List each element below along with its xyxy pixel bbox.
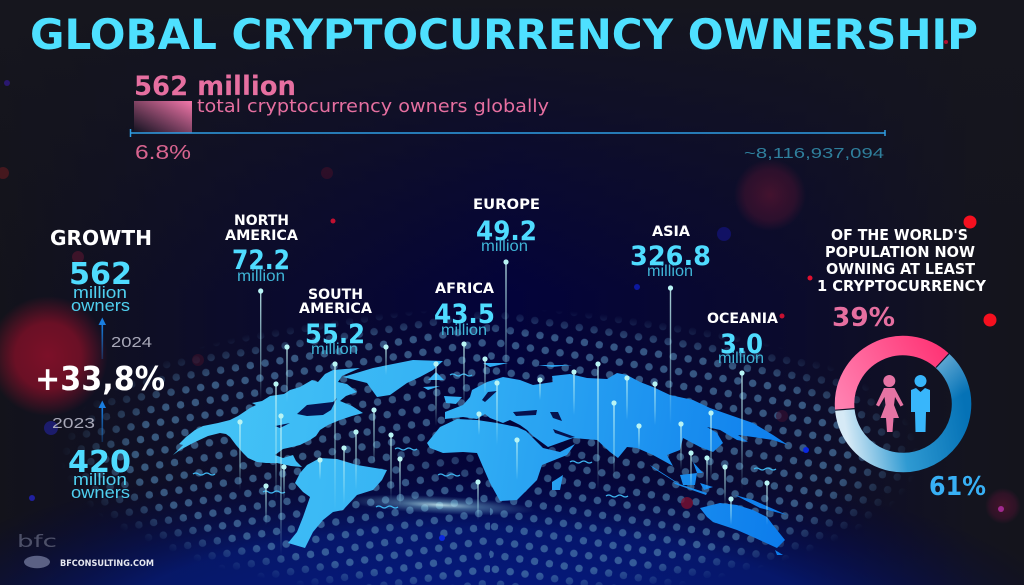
map: greenland — [343, 360, 443, 397]
region: north america — [225, 213, 298, 285]
2024 owners — [69, 257, 132, 315]
region: north america: AMERICA — [225, 228, 298, 244]
39 percent: 39% — [832, 303, 895, 333]
growth percentage: +33,8% — [35, 359, 165, 398]
2024 owners: owners — [71, 296, 130, 315]
region: oceania: million — [718, 350, 764, 367]
region: south america: AMERICA — [299, 301, 372, 317]
2023 label: 2023 — [52, 415, 95, 432]
arrow up 2024 — [98, 318, 106, 359]
share percent: 6.8% — [135, 142, 191, 164]
61 percent: 61% — [929, 472, 986, 502]
map: australia — [700, 503, 785, 548]
region: asia: ASIA — [652, 224, 690, 240]
region: north america: million — [237, 268, 285, 285]
world population: ~8,116,937,094 — [744, 145, 884, 162]
region: south america: million — [311, 341, 358, 358]
title: GLOBAL CRYPTOCURRENCY OWNERSHIP — [30, 10, 978, 59]
region: asia: million — [647, 263, 693, 280]
region: europe: 49.2 — [476, 216, 537, 247]
2024 label: 2024 — [111, 334, 152, 351]
region: south america: SOUTH — [308, 287, 363, 303]
share description — [817, 226, 987, 295]
map inland seas — [275, 391, 575, 438]
arrow up 2023 — [98, 400, 106, 442]
logo: bfc — [17, 532, 154, 569]
subtitle: total cryptocurrency owners globally — [197, 96, 549, 117]
light streak across the south atlantic — [345, 491, 535, 519]
region: north america: NORTH — [234, 213, 289, 229]
share description: OWNING AT LEAST — [826, 260, 976, 278]
share bar — [134, 101, 192, 132]
region: oceania: OCEANIA — [707, 311, 778, 327]
2023 owners — [68, 445, 131, 502]
2024 owners: 562 — [69, 257, 132, 292]
dotted perspective globe pattern — [40, 310, 940, 585]
region: south america: 55.2 — [305, 319, 365, 350]
panel: global owners progress bar — [130, 71, 885, 164]
share description: 1 CRYPTOCURRENCY — [817, 277, 987, 295]
ocean wave marks — [193, 374, 776, 508]
region: south america — [299, 287, 372, 358]
region: oceania: 3.0 — [720, 329, 763, 360]
region: north america: 72.2 — [232, 245, 290, 276]
region: africa: AFRICA — [435, 281, 494, 297]
map: north america — [173, 368, 363, 467]
headline number: 562 million — [134, 71, 296, 102]
map: islands — [423, 363, 787, 555]
map location pins — [237, 259, 770, 555]
2023 owners: owners — [71, 483, 130, 502]
region: europe: EUROPE — [473, 197, 540, 213]
region: europe — [473, 197, 540, 255]
growth heading: GROWTH — [50, 226, 152, 250]
region: oceania — [707, 311, 778, 367]
region: asia — [630, 224, 711, 280]
axis line — [130, 129, 885, 137]
share description: OF THE WORLD'S — [831, 226, 968, 244]
donut chart — [835, 346, 962, 463]
logo: bfc: BFCONSULTING.COM — [60, 559, 154, 569]
2024 owners: million — [73, 283, 127, 302]
region: africa: million — [441, 322, 487, 339]
panel: growth — [35, 226, 165, 502]
icon: woman — [876, 375, 904, 432]
map: eurasia — [445, 373, 788, 466]
region: africa — [434, 281, 495, 339]
region: asia: 326.8 — [630, 241, 711, 272]
icon: man — [911, 375, 930, 432]
map: south america — [288, 458, 387, 548]
map: africa — [427, 419, 575, 501]
panel: population share — [817, 226, 987, 502]
region: europe: million — [481, 238, 528, 255]
logo: bfc: bfc — [17, 532, 57, 552]
2023 owners: 420 — [68, 445, 131, 480]
2023 owners: million — [73, 470, 127, 489]
share description: POPULATION NOW — [825, 243, 975, 261]
region: africa: 43.5 — [434, 299, 495, 330]
world map — [173, 360, 788, 555]
